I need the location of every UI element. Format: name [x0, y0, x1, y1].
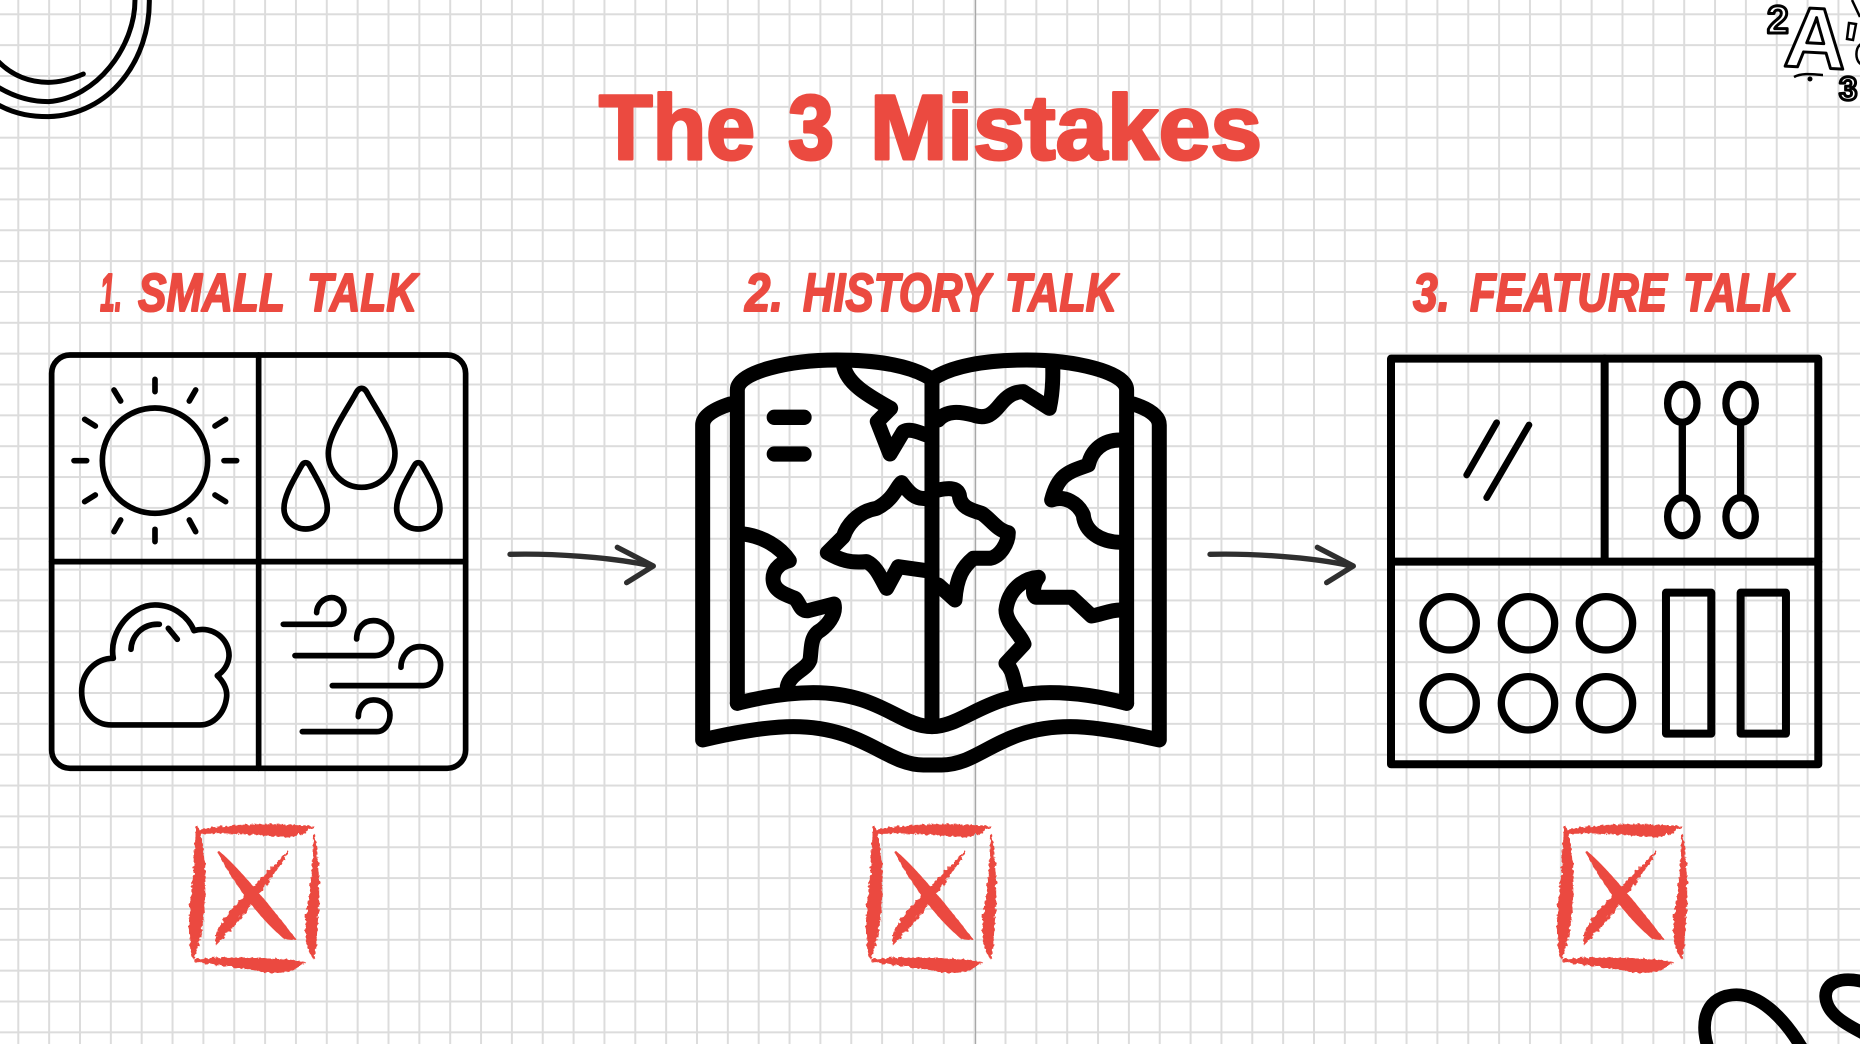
page text dashes	[774, 417, 804, 454]
heading: 2. History Talk: HISTORY	[803, 263, 994, 323]
heading: 2. History Talk: TALK	[1005, 263, 1120, 323]
heading: 3. Feature Talk	[1413, 263, 1796, 323]
heading: 1. Small Talk	[100, 263, 420, 323]
icon: weather grid	[52, 355, 466, 768]
decoration: top-right doodle letters: 2	[1767, 0, 1789, 42]
icon: wind	[283, 598, 441, 732]
icon: rain drops	[284, 388, 440, 529]
screen glare	[1467, 423, 1529, 498]
decoration: bottom-right thick loops	[1705, 980, 1860, 1044]
decoration: top-right doodle letters	[1767, 0, 1860, 107]
icon: red crossed box 3	[1558, 825, 1686, 972]
sliders	[1668, 384, 1755, 536]
heading: 3. Feature Talk: FEATURE	[1470, 263, 1669, 323]
icon: red crossed box 1	[190, 825, 318, 972]
icon: open book with world map	[703, 360, 1159, 765]
arrow: small talk to history talk	[510, 547, 653, 583]
icon: sun	[74, 379, 237, 542]
icon: cloud	[82, 605, 229, 725]
panel frame	[1391, 359, 1818, 764]
map continents	[743, 363, 1120, 690]
heading: 2. History Talk	[744, 263, 1120, 323]
heading: 1. Small Talk: 1.	[100, 263, 122, 323]
title: Mistakes	[870, 77, 1262, 179]
heading: 1. Small Talk: SMALL	[138, 263, 285, 323]
title: 3	[788, 77, 834, 179]
title	[599, 77, 1262, 179]
rectangular slots	[1666, 593, 1786, 734]
heading: 3. Feature Talk: TALK	[1683, 263, 1796, 323]
decoration: top-right doodle letters: 3	[1839, 70, 1857, 107]
weather grid frame	[52, 355, 466, 768]
decoration: top-left concentric arcs	[0, 0, 149, 117]
round buttons	[1423, 597, 1633, 730]
heading: 2. History Talk: 2.	[744, 263, 783, 323]
heading: 3. Feature Talk: 3.	[1413, 263, 1450, 323]
icon: red crossed box 2	[867, 825, 995, 972]
heading: 1. Small Talk: TALK	[307, 263, 420, 323]
title: The	[599, 77, 755, 179]
icon: feature control panel	[1391, 359, 1818, 764]
book outline	[703, 360, 1159, 765]
arrow: history talk to feature talk	[1210, 547, 1353, 583]
